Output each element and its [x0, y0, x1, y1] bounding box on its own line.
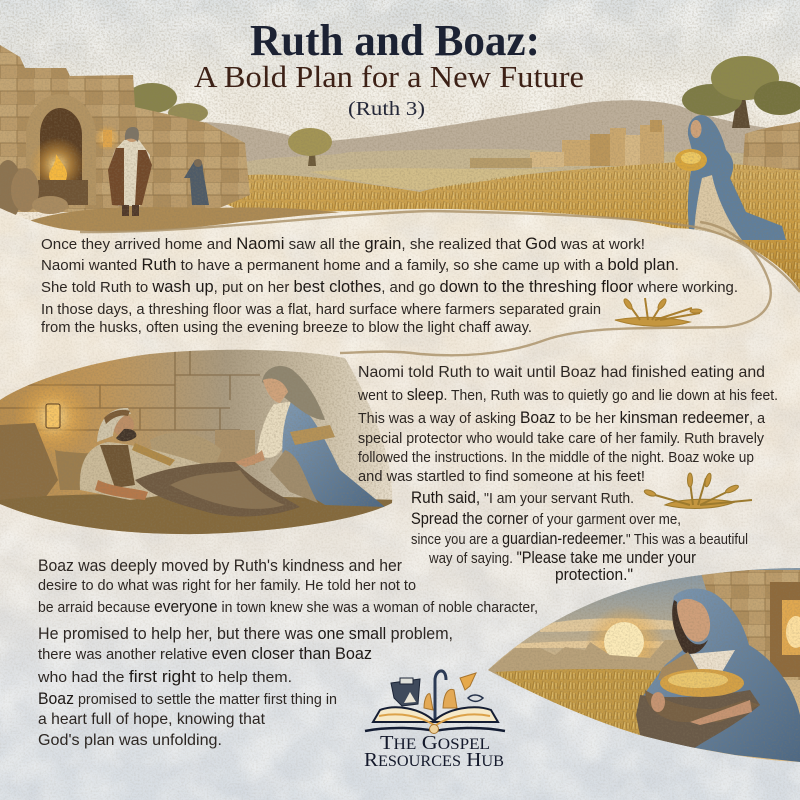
title block	[194, 16, 584, 120]
stone blocks	[0, 350, 260, 431]
text block: kinsman redeemer: This was a way of asking Boaz to be her kinsman redeemer, a	[358, 409, 766, 427]
icon: wheat sprig small	[644, 473, 752, 508]
text block: Boaz's promise: be arraid because everyone in town knew she was a woman of noble character,	[38, 598, 538, 616]
text block: Boaz's promise	[37, 557, 538, 749]
logo: The Gospel Resources Hub: RESOURCES HUB	[364, 749, 504, 771]
text block: kinsman redeemer: way of saying. "Please take me under your	[428, 549, 696, 567]
text block: Boaz's promise: Boaz promised to settle the matter first thing in	[38, 690, 337, 708]
text block: Boaz's promise: who had the first right to help them.	[37, 668, 292, 686]
Ruth carrying wheat	[675, 115, 786, 240]
text block: kinsman redeemer	[357, 364, 778, 584]
text block: Boaz's promise: Boaz was deeply moved by Ruth's kindness and her	[38, 557, 402, 575]
logo: The Gospel Resources Hub	[364, 671, 505, 771]
text block: Boaz's promise: a heart full of hope, knowing that	[38, 711, 266, 728]
Naomi figure	[108, 127, 152, 216]
distant town	[470, 120, 664, 168]
town	[488, 640, 690, 680]
wheat fields	[211, 162, 800, 290]
Boaz figure	[80, 408, 205, 500]
text block: kinsman redeemer: Naomi told Ruth to wait until Boaz had finished eating and	[358, 364, 765, 381]
text block: Boaz's promise: desire to do what was right for her family. He told her not to	[38, 577, 416, 594]
Ruth figure	[235, 366, 385, 507]
scripture reference: (Ruth 3)	[348, 98, 425, 120]
left stone wall	[0, 45, 250, 212]
left trees	[134, 83, 208, 122]
boulders	[0, 160, 68, 220]
distant hills	[205, 100, 768, 162]
rock	[0, 423, 58, 505]
text block: Naomi's plan: She told Ruth to wash up, put on her best clothes, and go down to the threshing floor where working.	[41, 278, 738, 296]
blanket	[135, 462, 300, 516]
small tree	[288, 128, 332, 166]
text block: Boaz's promise: there was another relative even closer than Boaz	[38, 645, 372, 663]
ground	[0, 494, 392, 534]
text block: Naomi's plan: from the husks, often using the evening breeze to blow the light chaff away.	[41, 319, 532, 336]
text block: kinsman redeemer: followed the instructions. In the middle of the night. Boaz woke up	[358, 449, 754, 466]
text block: kinsman redeemer: special protector who would take care of her family. Ruth bravely	[358, 430, 764, 447]
clouds	[514, 618, 674, 648]
title: Ruth and Boaz: Ruth and Boaz:	[250, 16, 540, 65]
subtitle: A Bold Plan for a New Future	[194, 59, 584, 94]
bottom illustration: Ruth at sunrise with grain	[480, 560, 800, 770]
text block: kinsman redeemer: since you are a guardian-redeemer." This was a beautiful	[411, 530, 748, 548]
text block: kinsman redeemer: went to sleep. Then, Ruth was to quietly go and lie down at his feet.	[357, 386, 778, 404]
text block: Boaz's promise: He promised to help her, but there was one small problem,	[38, 625, 453, 643]
stone arch with fire	[26, 94, 96, 205]
lantern	[19, 384, 88, 449]
sun	[588, 608, 662, 658]
text block: kinsman redeemer: Spread the corner of your garment over me,	[411, 510, 681, 528]
wheat field	[495, 669, 680, 745]
middle illustration: Ruth at Boaz's feet	[0, 350, 392, 534]
right stone wall	[743, 122, 800, 170]
text block: Naomi's plan: Once they arrived home and Naomi saw all the grain, she realized that God was at work!	[41, 235, 645, 253]
text block: Naomi's plan: In those days, a threshing floor was a flat, hard surface where farmers separated grain	[41, 301, 601, 318]
text block: kinsman redeemer: and was startled to find someone at his feet!	[358, 468, 645, 485]
logo icon: ark, crook, hands, dove, fish, open book	[365, 671, 505, 734]
Ruth figure	[636, 588, 800, 762]
lantern on wall	[96, 128, 118, 148]
hill ridge	[247, 149, 744, 192]
icon: wheat sprig	[615, 298, 702, 326]
curved ribbon border of text panel	[80, 211, 800, 355]
text block: Naomi's plan	[41, 235, 738, 336]
ground path	[30, 207, 340, 232]
logo wordmark: THE GOSPEL	[380, 732, 490, 754]
text block: Naomi's plan: Naomi wanted Ruth to have a permanent home and a family, so she came up with a bold plan.	[41, 256, 679, 274]
text block: kinsman redeemer: Ruth said, "I am your servant Ruth.	[411, 489, 634, 507]
child figure	[184, 159, 209, 205]
text block: Boaz's promise: God's plan was unfolding.	[38, 732, 222, 749]
text block: kinsman redeemer: protection."	[555, 566, 633, 584]
top illustration: home, wheat field, Ruth and Naomi	[0, 0, 800, 300]
right tree	[682, 56, 800, 128]
stone wall	[700, 570, 800, 680]
